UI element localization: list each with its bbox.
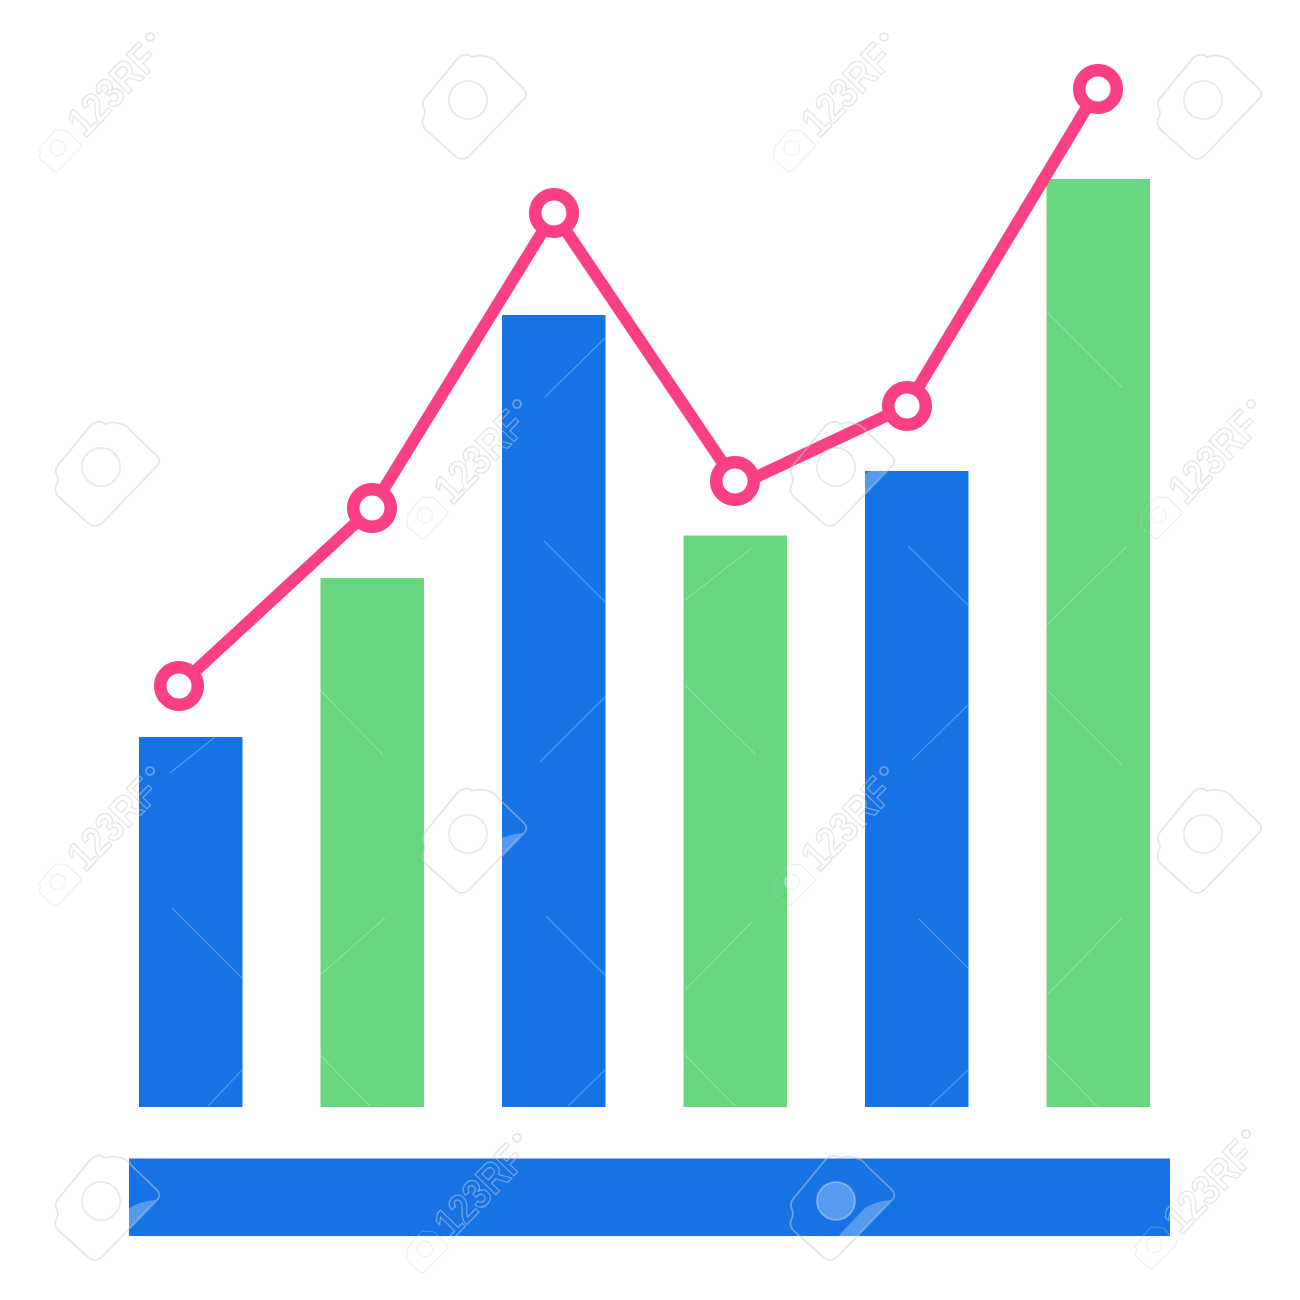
watermark logos: 123RF (792, 34, 901, 145)
bar 2 (320, 578, 424, 1107)
watermark logos: 123RF (425, 401, 534, 512)
base bar (129, 1158, 1170, 1236)
bar 1 (139, 737, 242, 1107)
trend point 4 (716, 462, 754, 500)
watermark logos: 123RF (58, 34, 167, 145)
bar 5 (865, 471, 968, 1107)
watermark logos: 123RF (58, 768, 167, 879)
bar 4 (684, 536, 787, 1107)
watermark logos: 123RF (792, 768, 901, 879)
trend point 3 (535, 194, 573, 232)
trend point 1 (160, 667, 198, 705)
watermark logos: 123RF (1159, 401, 1268, 512)
watermark logos: 123RF (1154, 1131, 1263, 1242)
watermark logos: 123RF (425, 1135, 534, 1246)
trend line (179, 89, 1098, 686)
trend point 6 (1079, 70, 1117, 108)
trend point 5 (888, 387, 926, 425)
trend point 2 (353, 489, 391, 527)
bar 3 (502, 315, 606, 1107)
faint diagonal watermark lines on bars (170, 312, 1127, 1106)
bar 6 (1046, 179, 1150, 1107)
